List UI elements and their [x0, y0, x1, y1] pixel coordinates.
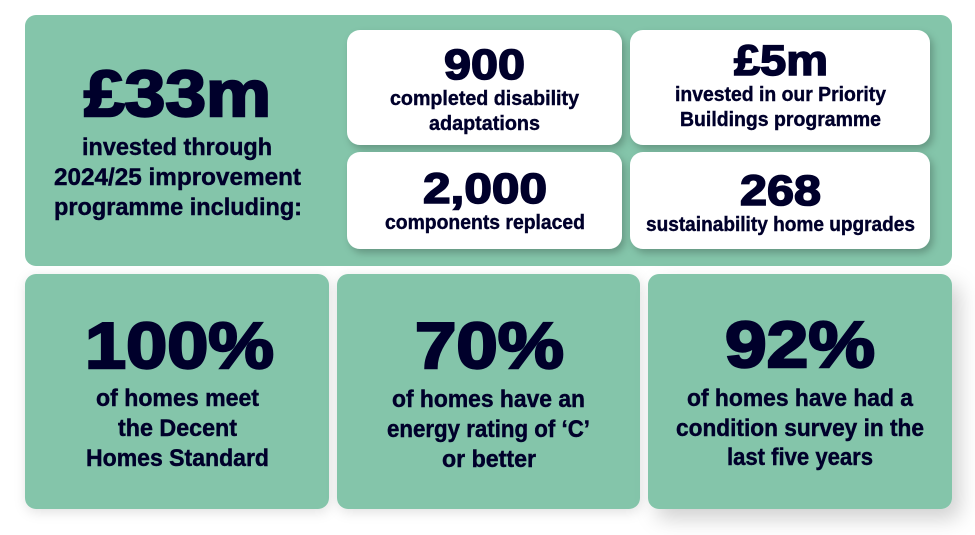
card: 900 disability adaptations: adaptations [429, 113, 540, 135]
card: £5m Priority Buildings: invested in our Priority [675, 84, 887, 106]
panel: 70% energy rating: or better [442, 446, 536, 473]
headline: £33m invested [54, 57, 302, 221]
headline: £33m invested: invested through [82, 134, 272, 161]
panel: 92% condition survey: last five years [727, 444, 873, 471]
panel: 100% Decent Homes [25, 274, 329, 509]
panel: 100% Decent Homes: Homes Standard [86, 445, 269, 472]
panel: 70% energy rating [337, 274, 640, 509]
card: 2,000 components: 2,000 [423, 165, 547, 213]
panel: 100% Decent Homes: 100% [85, 309, 274, 382]
card: £5m Priority Buildings: £5m [734, 37, 828, 85]
panel: 92% condition survey: 92% [725, 308, 875, 381]
card: 900 disability adaptations [347, 30, 622, 145]
card: £5m Priority Buildings [630, 30, 930, 145]
card: 2,000 components [347, 152, 622, 249]
panel: 92% condition survey [648, 274, 952, 509]
panel: 100% Decent Homes: of homes meet [96, 385, 259, 412]
panel: 92% condition survey: condition survey in the [676, 415, 924, 442]
card: 900 disability adaptations: 900 [444, 41, 525, 89]
headline: £33m invested: programme including: [54, 194, 302, 221]
panel: 100% Decent Homes: the Decent [118, 415, 237, 442]
panel: improvement programme [25, 15, 952, 266]
panel: 70% energy rating: of homes have an [392, 386, 585, 413]
card: £5m Priority Buildings: Buildings programme [680, 109, 881, 131]
panel: 70% energy rating: energy rating of ‘C’ [387, 416, 590, 443]
panel: 70% energy rating: 70% [415, 309, 564, 382]
card: 2,000 components: components replaced [385, 212, 585, 234]
card: 268 sustainability upgrades: 268 [740, 167, 821, 215]
card: 900 disability adaptations: completed disability [390, 88, 580, 110]
panel: 92% condition survey: of homes have had a [687, 385, 914, 412]
card: 268 sustainability upgrades: sustainability home upgrades [646, 214, 915, 236]
card: 268 sustainability upgrades [630, 152, 930, 249]
headline: £33m invested: £33m [84, 57, 271, 130]
headline: £33m invested: 2024/25 improvement [54, 164, 301, 191]
